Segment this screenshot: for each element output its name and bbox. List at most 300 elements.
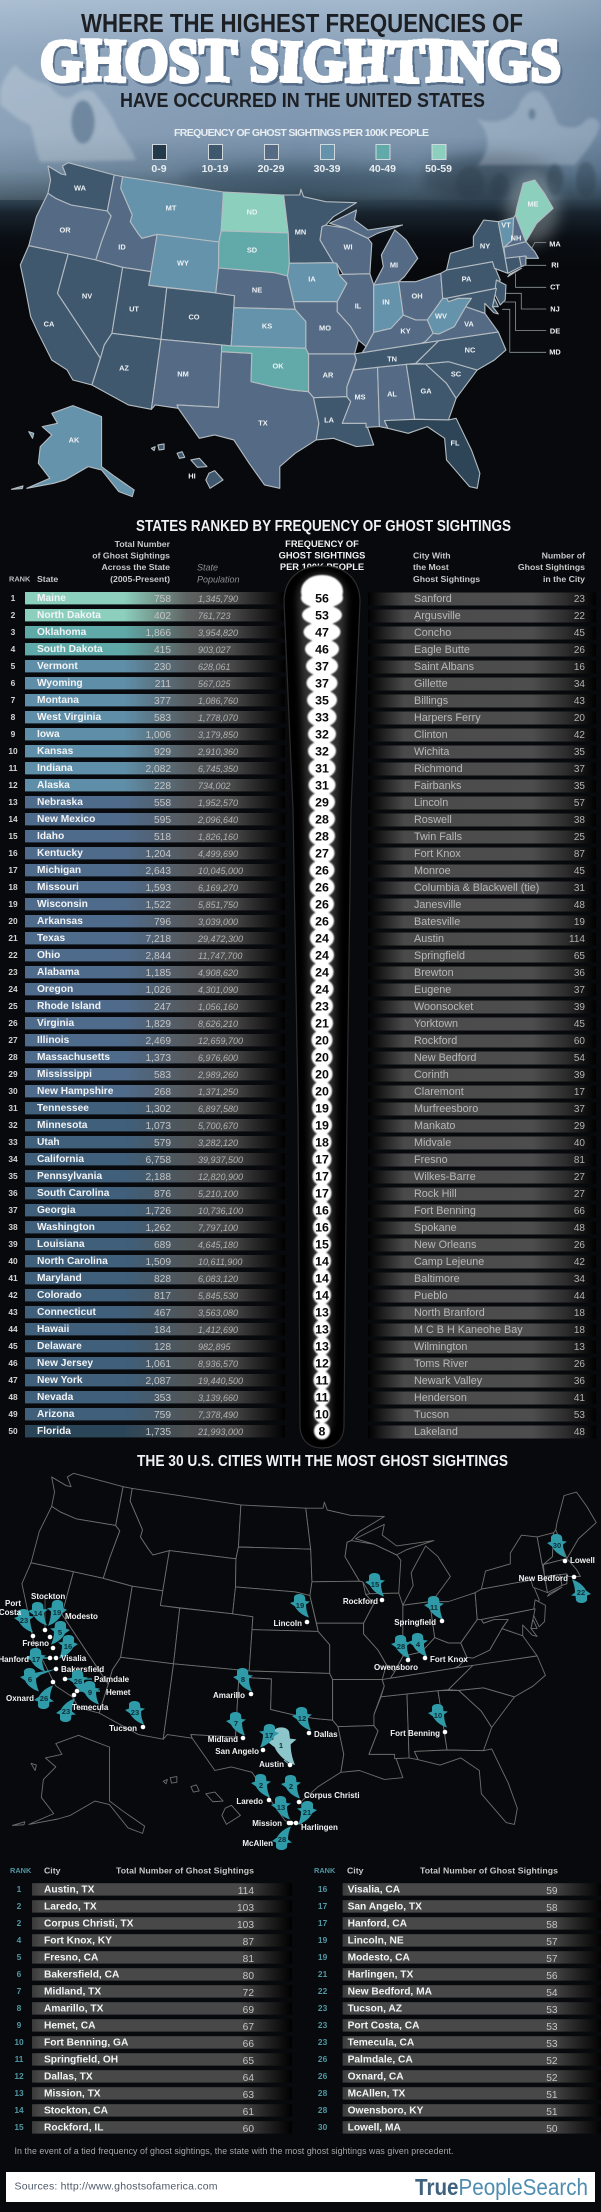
row 20: 20 [8, 916, 18, 926]
city row 10: Fort Benning, GA [44, 2038, 129, 2048]
pin: Oxnard: 26 [40, 1694, 48, 1703]
pin: Lincoln [274, 1594, 310, 1628]
row 5: 5 [11, 661, 16, 671]
pin: Rockford: Rockford [343, 1597, 378, 1606]
pin: Fresno: 5 [58, 1628, 63, 1637]
row 49 [8, 1408, 596, 1422]
logo: TruePeopleSearch: TruePeopleSearch [415, 2174, 588, 2200]
row 15: 518 [154, 832, 171, 843]
pin: Tucson [109, 1701, 145, 1733]
state labels: WY [177, 258, 189, 268]
city row 23: 23 [318, 2003, 328, 2013]
row 19: 1,522 [146, 900, 171, 911]
state labels: OH [411, 292, 423, 300]
row 36: Rock Hill [414, 1188, 457, 1200]
table: cities 16 to 30 [318, 1883, 601, 2135]
pin: Oxnard: Oxnard [6, 1694, 34, 1703]
pin: Mission: 13 [277, 1803, 285, 1812]
frequency values: 19 [315, 1118, 329, 1132]
pin: Fort Knox: 4 [416, 1640, 421, 1649]
row 46: Toms River [414, 1358, 468, 1370]
frequency values [315, 592, 329, 1438]
row 9 [11, 728, 596, 742]
row 30: Claremont [414, 1086, 464, 1098]
pin: Palmdale [63, 1670, 130, 1694]
city row 6: 80 [243, 1971, 254, 1982]
row 11: 2,082 [146, 764, 171, 775]
city row 3: 2 [17, 1918, 22, 1928]
row 18: 18 [8, 882, 18, 892]
pin: Hanford: 17 [32, 1655, 40, 1664]
row 6: 6 [11, 678, 16, 688]
table column headers: Number of [542, 550, 585, 560]
frequency values: 13 [315, 1322, 329, 1336]
row 32: Mankato [414, 1120, 455, 1132]
row 8: 8 [11, 712, 16, 722]
row 12: 228 [154, 781, 171, 792]
row 50: Florida [37, 1426, 71, 1437]
frequency values: 26 [315, 880, 329, 894]
row 11: 11 [9, 763, 18, 773]
row 37: 66 [574, 1206, 585, 1217]
row 38: Washington [37, 1222, 95, 1233]
state labels: VT [501, 220, 511, 230]
city table headers: Total Number of Ghost Sightings [420, 1866, 558, 1876]
row 20: Batesville [414, 916, 460, 928]
row 28: 6,976,600 [198, 1053, 238, 1063]
pin: Fresno: Fresno [22, 1639, 49, 1648]
pin: Lowell [547, 1534, 595, 1565]
illustration: misty trees [456, 162, 596, 200]
pin: Springfield [394, 1596, 444, 1627]
row 29 [8, 1068, 596, 1082]
row 2 [11, 609, 596, 622]
row 38: 1,262 [146, 1223, 171, 1234]
city row 3 [17, 1917, 292, 1931]
frequency values: 11 [315, 1374, 329, 1388]
frequency values: 27 [315, 846, 329, 860]
row 10: Kansas [37, 746, 74, 757]
pin: Modesto: Modesto [65, 1612, 98, 1621]
panel: misty sky header [0, 0, 601, 270]
row 13 [8, 796, 596, 810]
frequency values: 29 [315, 796, 329, 810]
state labels: UT [129, 304, 139, 314]
pin: Amarillo: 8 [241, 1675, 245, 1684]
row 47: 47 [8, 1375, 18, 1385]
frequency values: 17 [315, 1186, 329, 1200]
row 7: Billings [414, 695, 449, 707]
city row 13: Mission, TX [44, 2088, 101, 2100]
row 7: 7 [11, 695, 16, 705]
pin: Austin: 1 [279, 1741, 284, 1750]
pin: Corpus Christi: 2 [289, 1782, 293, 1791]
legend labels: 30-39 [314, 163, 341, 175]
row 4: 903,027 [198, 645, 232, 655]
row 48: 41 [574, 1393, 585, 1404]
state labels: OR [59, 226, 71, 234]
city row 7 [17, 1985, 292, 1999]
row 17: 2,643 [146, 866, 171, 877]
city row 23: Tucson, AZ [348, 2004, 402, 2014]
row 12: 35 [574, 781, 585, 792]
city row 24: 23 [318, 2020, 328, 2030]
row 18: Missouri [37, 882, 79, 893]
row 29: 39 [574, 1070, 585, 1081]
row 3: Oklahoma [37, 627, 87, 638]
row 3: Concho [414, 627, 451, 639]
row 31: Murfreesboro [414, 1103, 478, 1115]
frequency values: 24 [315, 982, 329, 996]
row 27: 2,469 [146, 1036, 171, 1047]
row 50: 1,735 [146, 1427, 171, 1438]
pin: Temecula: Temecula [72, 1703, 109, 1712]
row 24 [8, 983, 596, 996]
city row 27: Oxnard, CA [348, 2072, 404, 2082]
city row 1: Austin, TX [44, 1884, 95, 1896]
row 26 [8, 1017, 596, 1030]
city row 28: McAllen, TX [348, 2088, 406, 2100]
map: cities outline [12, 1473, 596, 1833]
row 43: 43 [8, 1307, 18, 1317]
row 23: 36 [574, 968, 585, 979]
city row 5 [17, 1951, 292, 1965]
pin: Owensboro [374, 1635, 418, 1672]
state labels: ND [247, 208, 258, 216]
row 7: 377 [154, 696, 171, 707]
state labels: IA [308, 274, 316, 284]
row 21: 7,218 [146, 934, 171, 945]
row 30: 1,371,250 [198, 1087, 238, 1097]
city row 18: Hanford, CA [348, 1918, 408, 1930]
frequency values: 26 [315, 898, 329, 912]
state labels: MN [295, 228, 306, 236]
city row 17: 17 [318, 1901, 328, 1911]
row 47: 36 [574, 1376, 585, 1387]
pin: Palmdale: 26 [74, 1677, 82, 1686]
state labels: WI [343, 242, 353, 252]
row 10: 10 [8, 746, 18, 756]
row 27 [8, 1034, 596, 1048]
row 45: 128 [154, 1342, 171, 1353]
row 6 [11, 677, 596, 690]
row 34: California [37, 1154, 84, 1165]
row 32: 32 [8, 1120, 18, 1130]
city row 2: Laredo, TX [44, 1902, 97, 1912]
city row 22: 22 [318, 1986, 328, 1996]
pin: Midland: 7 [234, 1719, 238, 1728]
row 21: 21 [8, 933, 18, 943]
row 41: Baltimore [414, 1273, 460, 1285]
row 33: 579 [154, 1138, 171, 1149]
pin: Port Costa: Port [5, 1599, 21, 1608]
row 28: 28 [8, 1052, 18, 1062]
frequency values: 31 [315, 762, 329, 776]
row 8: 583 [154, 713, 171, 724]
row 39: 26 [574, 1240, 585, 1251]
row 15 [8, 830, 596, 844]
city row 9: 9 [17, 2020, 22, 2030]
row 41: Maryland [37, 1273, 82, 1284]
pin: Visalia: 16 [64, 1642, 72, 1651]
row 44: 44 [8, 1324, 18, 1334]
title [39, 8, 563, 112]
pin: Visalia: Visalia [61, 1654, 87, 1663]
row 48 [8, 1391, 596, 1404]
city table headers: City [44, 1866, 61, 1876]
city table headers: RANK [10, 1866, 32, 1875]
pin: Dallas: 12 [298, 1714, 306, 1723]
row 19 [8, 898, 596, 912]
row 19: 19 [8, 899, 18, 909]
city row 10: 10 [14, 2037, 24, 2047]
row 33: Utah [37, 1137, 60, 1148]
row 5: 230 [154, 662, 171, 673]
pin: Rockford: 15 [371, 1580, 380, 1589]
row 26: 45 [574, 1019, 585, 1030]
row 22: 2,844 [146, 951, 171, 962]
legend labels: 0-9 [151, 163, 167, 175]
row 45: 13 [574, 1342, 585, 1353]
table column headers: in the City [543, 574, 585, 584]
state labels: SC [451, 370, 462, 378]
northeast state labels: NJ [550, 304, 560, 314]
city row 25: 23 [318, 2037, 328, 2047]
row 31: 31 [8, 1103, 18, 1113]
row 17: 45 [574, 866, 585, 877]
city row 24: 53 [546, 2022, 558, 2033]
pin: Fort Knox: Fort Knox [430, 1655, 468, 1664]
row 10: Wichita [414, 746, 449, 758]
city row 22: 54 [546, 1988, 558, 1999]
city row 13: 13 [14, 2088, 24, 2098]
frequency values: 15 [315, 1238, 329, 1252]
pin: San Angelo [215, 1724, 279, 1756]
legend labels [151, 163, 452, 175]
city row 11: 11 [15, 2054, 24, 2064]
legend labels: 20-29 [258, 163, 285, 175]
row 49: 49 [8, 1409, 18, 1419]
city row 18 [318, 1917, 601, 1931]
row 50: 48 [574, 1427, 585, 1438]
row 16: 4,499,690 [198, 849, 238, 859]
row 19: Wisconsin [37, 899, 88, 910]
row 42: 817 [154, 1291, 171, 1302]
row 39: New Orleans [414, 1239, 477, 1251]
frequency values: 33 [315, 710, 329, 724]
city row 2: 2 [17, 1901, 22, 1911]
row 2: 402 [154, 611, 171, 622]
pin: Harlingen: Harlingen [301, 1823, 338, 1832]
city row 19: 57 [546, 1937, 558, 1948]
row 42: 42 [8, 1290, 18, 1300]
pin: Temecula: 23 [62, 1707, 70, 1716]
row 1: Maine [37, 593, 66, 604]
row 27: Illinois [37, 1035, 70, 1046]
row 43: 467 [154, 1308, 171, 1319]
row 15: 25 [574, 832, 585, 843]
footnote: In the event of a tied frequency of ghost sightings, the state with the most ghost sightings was given precedent. [14, 2146, 454, 2156]
city row 9: 67 [243, 2022, 254, 2033]
row 2: North Dakota [37, 610, 101, 621]
pin: Dallas: Dallas [314, 1730, 338, 1739]
row 29: 29 [8, 1069, 18, 1079]
city row 27: 52 [546, 2073, 558, 2084]
legend [151, 127, 452, 175]
heading: 30 cities: THE 30 U.S. CITIES WITH THE MOST GHOST SIGHTINGS [137, 1453, 508, 1470]
pin: Austin [259, 1727, 296, 1769]
row 28: 54 [574, 1053, 585, 1064]
row 4: South Dakota [37, 644, 103, 655]
row 4 [11, 643, 596, 656]
row 35: Wilkes-Barre [414, 1171, 476, 1183]
frequency values: 14 [315, 1288, 329, 1302]
row 29: Corinth [414, 1069, 449, 1081]
pin: Fort Benning [390, 1704, 448, 1738]
row 43 [8, 1306, 596, 1320]
row 50 [8, 1425, 596, 1438]
map pins: ghosts, dots and city labels [0, 1534, 595, 1850]
frequency values: 11 [315, 1390, 329, 1404]
row 39 [8, 1238, 596, 1252]
pin: McAllen: 28 [278, 1835, 286, 1844]
state labels: NY [480, 242, 490, 250]
city row 8: Amarillo, TX [44, 2004, 104, 2014]
city row 3: Corpus Christi, TX [44, 1918, 134, 1930]
state labels: KS [262, 322, 272, 330]
pin: Port Costa [0, 1599, 35, 1638]
state labels: KY [400, 326, 411, 336]
city row 25 [318, 2036, 601, 2050]
frequency values: 20 [315, 1050, 329, 1064]
city row 1 [17, 1883, 292, 1897]
row 16 [8, 847, 596, 860]
state labels: IL [355, 302, 362, 310]
row 37: 37 [8, 1205, 18, 1215]
row 18: 31 [574, 883, 585, 894]
row 42: Pueblo [414, 1290, 448, 1302]
row 8: 1,778,070 [198, 713, 238, 723]
row 8: West Virginia [37, 712, 101, 723]
row 29: 2,989,260 [197, 1070, 238, 1080]
city row 11 [15, 2053, 292, 2067]
city row 4 [17, 1934, 292, 1948]
city row 21: 21 [318, 1969, 328, 1979]
city row 15: Rockford, IL [44, 2122, 103, 2134]
frequency values: 16 [315, 1220, 329, 1234]
pin: Bakersfield: 6 [28, 1675, 32, 1684]
row 5: 628,061 [198, 662, 231, 672]
row 45: 45 [8, 1341, 18, 1351]
row 26: 8,626,210 [198, 1019, 238, 1029]
row 22: Springfield [414, 950, 465, 962]
row 35: 2,188 [146, 1172, 171, 1183]
row 45: Wilmington [414, 1341, 467, 1353]
city row 8: 8 [17, 2003, 22, 2013]
city row 21 [318, 1968, 601, 1982]
row 38 [8, 1221, 596, 1234]
city row 26: 52 [546, 2056, 558, 2067]
table column headers: State [37, 574, 58, 584]
city row 12: 64 [243, 2073, 254, 2084]
city row 19: Lincoln, NE [348, 1936, 404, 1946]
row 34: Fresno [414, 1154, 448, 1166]
city row 20 [318, 1951, 601, 1965]
row 28: New Bedford [414, 1052, 476, 1064]
row 12: 12 [8, 780, 18, 790]
frequency values: 19 [315, 1102, 329, 1116]
row 12: Fairbanks [414, 780, 462, 792]
legend labels: 50-59 [425, 163, 452, 175]
row 40: Camp Lejeune [414, 1256, 484, 1268]
city row 24 [318, 2019, 601, 2033]
row 44: 184 [154, 1325, 171, 1336]
row 26: 1,829 [146, 1019, 171, 1030]
pin: Stockton [28, 1592, 65, 1632]
city row 27 [318, 2070, 601, 2084]
city row 16: 59 [546, 1886, 558, 1897]
table column headers: PER 100K PEOPLE [280, 562, 364, 572]
frequency values: 24 [315, 932, 329, 946]
frequency values: 16 [315, 1204, 329, 1218]
pin: Springfield: Springfield [394, 1618, 436, 1627]
row 49: 759 [154, 1410, 171, 1421]
row 44: 1,412,690 [198, 1325, 238, 1335]
city row 16: Visalia, CA [348, 1884, 401, 1896]
row 35: 27 [574, 1172, 585, 1183]
row 24: 4,301,090 [198, 985, 238, 995]
city row 7: Midland, TX [44, 1986, 101, 1998]
row 11: 6,745,350 [198, 764, 238, 774]
row 48: 3,139,660 [198, 1393, 238, 1403]
row 28: 1,373 [146, 1053, 171, 1064]
row 21: Austin [414, 933, 444, 945]
row 36: 5,210,100 [198, 1189, 238, 1199]
row 13: Nebraska [37, 797, 83, 808]
row 31: 6,897,580 [198, 1104, 238, 1114]
row 2: 2 [11, 610, 16, 620]
table column headers: RANK [9, 574, 31, 584]
frequency values: 28 [315, 812, 329, 826]
city row 28: 51 [546, 2090, 558, 2101]
heading line 2: ghost sightings: GHOST SIGHTINGS [39, 28, 561, 94]
row 44: 18 [574, 1325, 585, 1336]
city row 6: Bakersfield, CA [44, 1970, 120, 1980]
row 37: Fort Benning [414, 1205, 476, 1217]
row 14: 2,096,640 [197, 815, 238, 825]
city row 29: 28 [318, 2105, 328, 2115]
pin: Hemet [75, 1681, 131, 1704]
row 6: 567,025 [198, 679, 232, 689]
row 22: Ohio [37, 950, 60, 961]
row 22: 65 [574, 951, 585, 962]
state labels: NV [82, 292, 92, 300]
row 22: 22 [8, 950, 18, 960]
row 27: 27 [8, 1035, 18, 1045]
city row 26: Palmdale, CA [348, 2054, 413, 2066]
table column headers: (2005-Present) [110, 574, 170, 584]
row 30: 17 [574, 1087, 585, 1098]
row 23: 1,185 [146, 968, 171, 979]
state labels: NE [252, 286, 262, 294]
row 20: 3,039,000 [198, 917, 238, 927]
pin: San Angelo: 17 [265, 1731, 273, 1740]
row 12: 734,002 [198, 781, 231, 791]
row 48: 353 [154, 1393, 171, 1404]
city row 4: 4 [17, 1935, 22, 1945]
city row 14: Stockton, CA [44, 2106, 109, 2116]
row 23: 23 [8, 967, 18, 977]
